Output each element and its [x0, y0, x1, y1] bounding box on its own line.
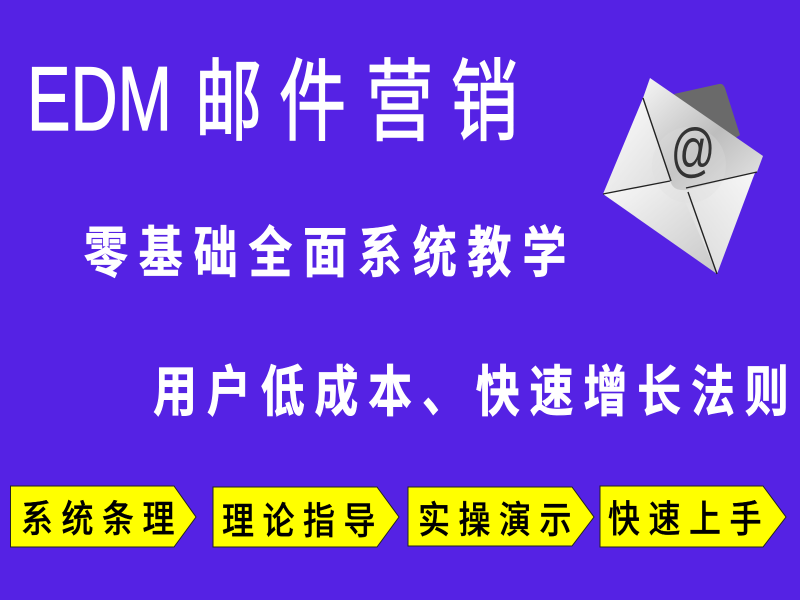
arrow tag: 实操演示: 实操演示: [418, 500, 580, 542]
title: 营: [366, 53, 433, 152]
icon: envelope with at sign: [603, 78, 763, 274]
arrow tag: 系统条理: 系统条理: [21, 499, 183, 541]
title: [27, 49, 518, 152]
subtitle: 零基础全面系统教学: [84, 222, 577, 284]
fold lines: [603, 98, 757, 274]
envelope left panel: [603, 98, 680, 194]
arrow tag: 系统条理: [10, 486, 196, 547]
arrow tag: 实操演示: [408, 487, 594, 546]
title: 邮: [195, 53, 262, 152]
envelope bottom panel: [603, 181, 717, 274]
at sign halo: [652, 127, 726, 203]
arrow tag: 快速上手: [600, 486, 786, 547]
arrow tag: 快速上手: 快速上手: [608, 499, 770, 541]
envelope flap: [643, 78, 763, 190]
headline: low cost growth: 用户低成本、快速增长法则: [153, 361, 799, 423]
arrow tag: 理论指导: 理论指导: [222, 501, 384, 543]
title: EDM: [27, 49, 172, 150]
title: 件: [279, 53, 346, 152]
at sign: @: [670, 118, 715, 184]
envelope right panel: [680, 168, 757, 274]
title: 销: [451, 53, 518, 152]
letter card: [674, 84, 740, 160]
arrow tag: 理论指导: [213, 487, 399, 547]
